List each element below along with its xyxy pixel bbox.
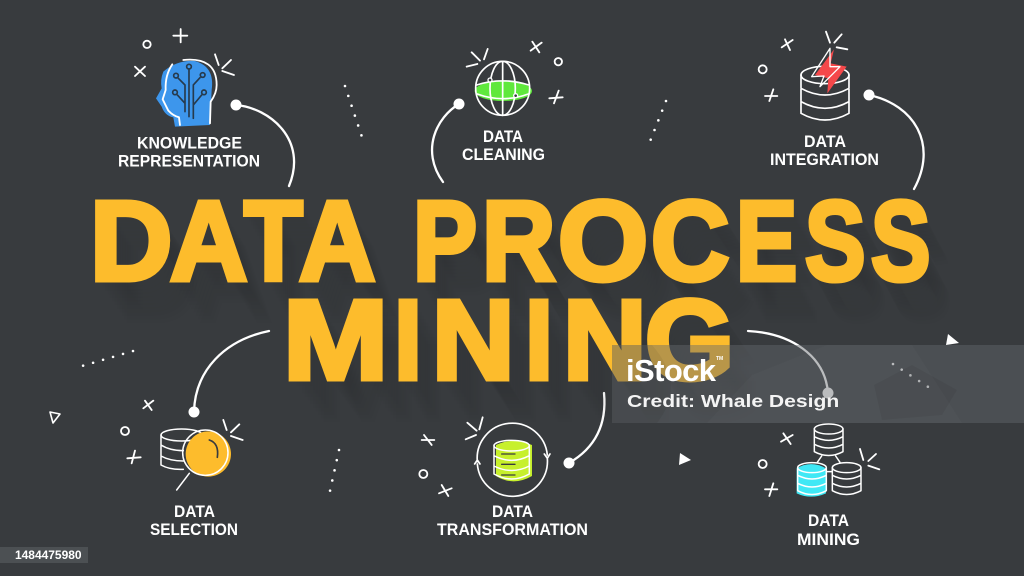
icon: head with circuit brain <box>135 29 234 127</box>
title: Data Process Mining: I <box>394 277 422 403</box>
label: data transformation: TRANSFORMATION <box>437 521 588 539</box>
label: knowledge representation: KNOWLEDGE <box>137 134 242 152</box>
panel: data integration <box>759 32 924 189</box>
title: Data Process Mining <box>90 178 930 415</box>
watermark credit: Credit: Whale Design <box>627 391 839 411</box>
connector arc <box>188 331 269 418</box>
title: Data Process Mining: R <box>482 178 555 304</box>
connector arc <box>230 100 294 186</box>
label: data selection: DATA <box>174 503 215 521</box>
connector arc <box>564 393 604 468</box>
panel: data mining <box>748 331 879 549</box>
icon: database with lightning <box>759 32 849 120</box>
title: Data Process Mining: E <box>736 178 797 304</box>
connector arc <box>748 331 834 398</box>
decorative triangles <box>50 334 959 465</box>
label: data cleaning: DATA <box>483 128 523 146</box>
image id stamp <box>0 547 88 563</box>
watermark logo: iStock <box>626 353 715 388</box>
title: Data Process Mining: A <box>170 178 248 304</box>
label: data integration: INTEGRATION <box>770 151 879 169</box>
connector arc <box>864 90 924 189</box>
title: Data Process Mining: N <box>432 277 514 403</box>
title: Data Process Mining: P <box>413 178 477 304</box>
image id stamp: 1484475980 <box>15 548 82 562</box>
label: data mining: DATA <box>808 512 849 530</box>
label: data cleaning: CLEANING <box>462 146 545 164</box>
watermark band: TM <box>716 356 723 362</box>
title: Data Process Mining: D <box>90 178 172 304</box>
panel: data cleaning <box>432 42 563 182</box>
decorative dotted lines <box>82 86 936 500</box>
title: Data Process Mining: O <box>558 178 648 304</box>
panel: knowledge representation <box>118 29 294 186</box>
title: Data Process Mining: S <box>804 178 865 304</box>
title: Data Process Mining: T <box>244 178 303 304</box>
label: data integration: DATA <box>804 133 846 151</box>
label: data selection: SELECTION <box>150 521 238 539</box>
title: Data Process Mining: A <box>299 178 376 304</box>
icon: three linked databases <box>759 424 879 497</box>
panel: data selection <box>121 331 269 539</box>
label: knowledge representation: REPRESENTATION <box>118 152 260 170</box>
title: Data Process Mining: I <box>524 277 553 403</box>
title: Data Process Mining: N <box>563 277 646 403</box>
label: data transformation: DATA <box>492 503 533 521</box>
title: Data Process Mining: M <box>283 277 389 403</box>
title: Data Process Mining: S <box>870 178 930 304</box>
panel: data transformation <box>419 393 604 539</box>
label: data mining: MINING <box>797 531 860 549</box>
watermark band <box>612 345 1024 423</box>
icon: globe with green ellipse <box>467 42 563 115</box>
icon: lime database in cycle <box>419 417 550 496</box>
icon: database with magnifier <box>121 401 243 490</box>
title: Data Process Mining: G <box>645 277 734 403</box>
connector arc <box>432 98 464 182</box>
title: Data Process Mining: C <box>651 178 730 304</box>
